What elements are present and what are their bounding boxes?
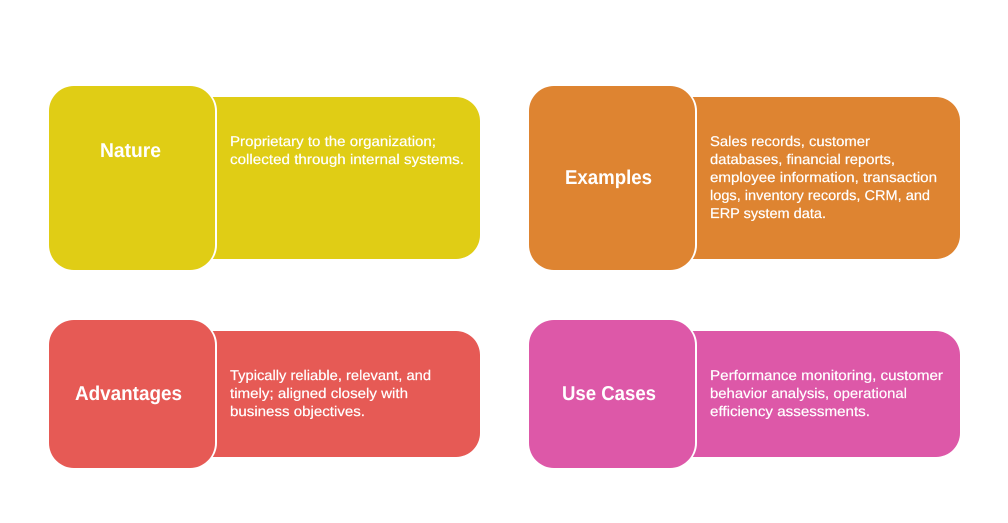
- description panel: Examples: employee information, transaction: [710, 169, 937, 185]
- description panel: Advantages: timely; aligned closely with: [230, 385, 408, 401]
- description panel: Examples: databases, financial reports,: [710, 151, 895, 167]
- description panel: Examples: ERP system data.: [710, 205, 826, 221]
- description panel: Examples: logs, inventory records, CRM, and: [710, 187, 930, 203]
- description panel: Advantages: business objectives.: [230, 403, 365, 419]
- description panel: Examples: Sales records, customer: [710, 133, 870, 149]
- heading box: Use Cases: Use Cases: [562, 383, 656, 405]
- panel: Nature: [49, 86, 480, 270]
- heading box: Examples: [529, 86, 697, 270]
- description panel: Advantages: [190, 331, 480, 457]
- panel: Examples: [529, 86, 960, 270]
- description panel: Nature: collected through internal systems.: [230, 151, 464, 167]
- heading box: Advantages: Advantages: [75, 383, 182, 405]
- heading box: Nature: Nature: [100, 140, 161, 162]
- panel: Advantages: [49, 320, 480, 468]
- description panel: Use Cases: [670, 331, 960, 457]
- description panel: Nature: [190, 97, 480, 259]
- heading box: Examples: Examples: [565, 167, 652, 189]
- description panel: Nature: Proprietary to the organization;: [230, 133, 436, 149]
- description panel: Advantages: Typically reliable, relevant, and: [230, 367, 431, 383]
- heading box: Nature: [49, 86, 217, 270]
- description panel: Use Cases: behavior analysis, operational: [710, 385, 907, 401]
- panel: Use Cases: [529, 320, 960, 468]
- description panel: Examples: [670, 97, 960, 259]
- description panel: Use Cases: efficiency assessments.: [710, 403, 870, 419]
- heading box: Use Cases: [529, 320, 697, 468]
- description panel: Use Cases: Performance monitoring, customer: [710, 367, 943, 383]
- heading box: Advantages: [49, 320, 217, 468]
